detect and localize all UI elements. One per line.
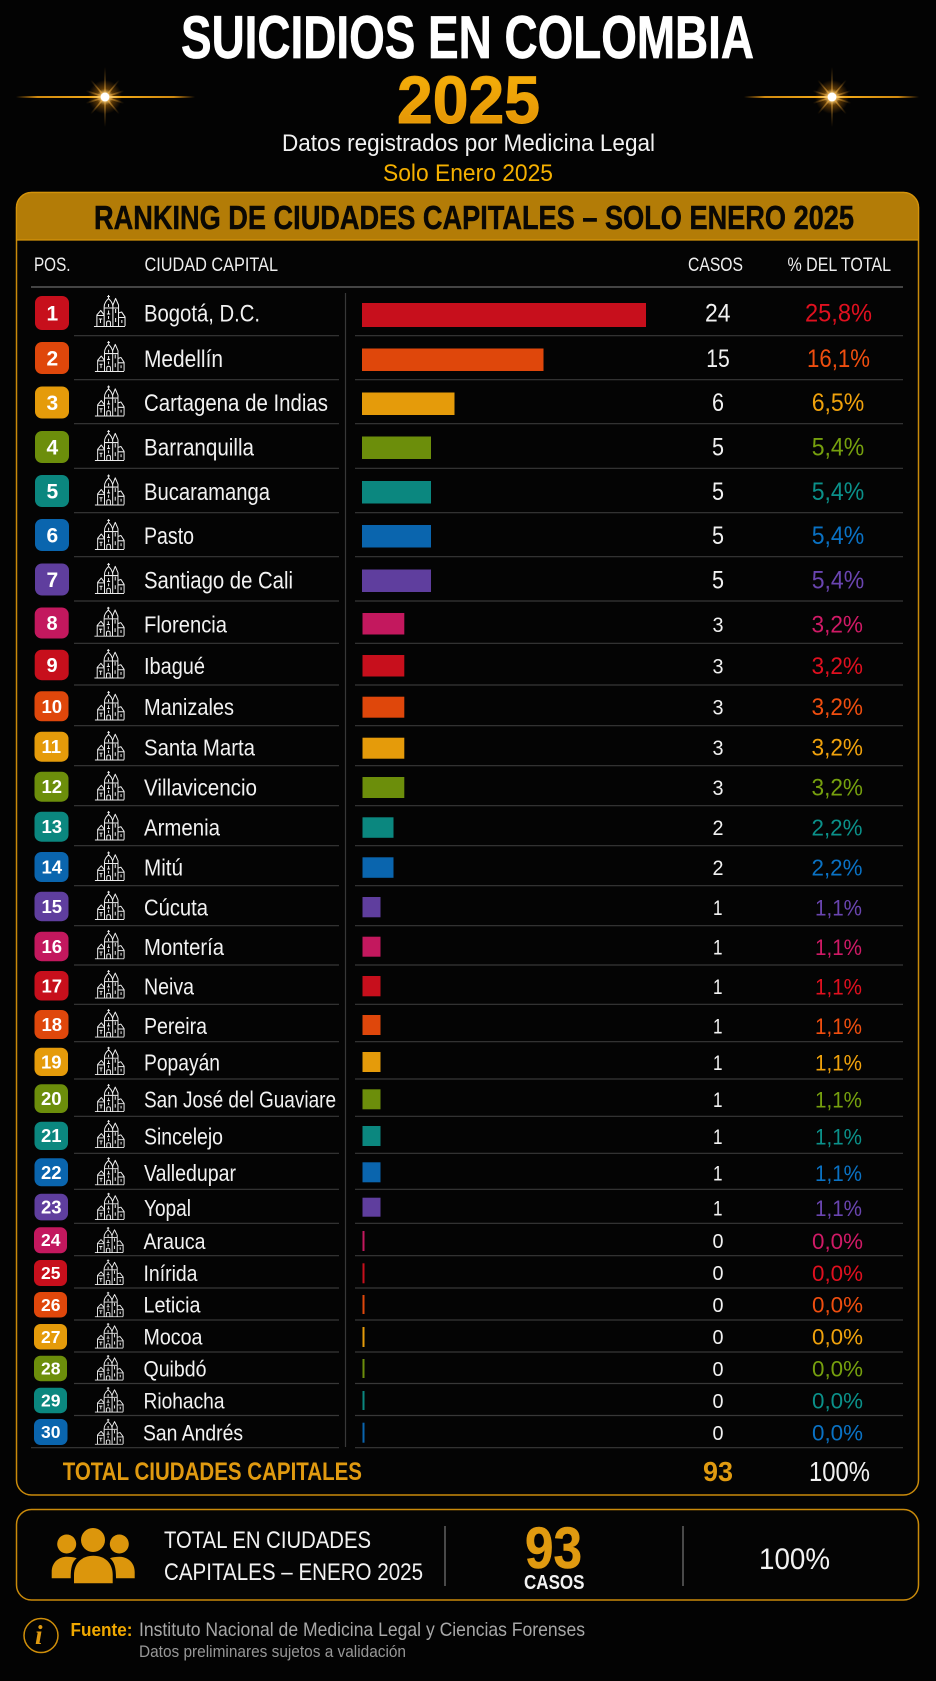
icon: church — [95, 771, 124, 800]
bar — [362, 1295, 364, 1314]
bar — [362, 897, 380, 917]
badge 10 — [34, 691, 68, 721]
bar — [362, 817, 394, 838]
city: Arauca — [144, 1229, 206, 1254]
summary label: TOTAL EN CIUDADES — [164, 1527, 371, 1554]
share: 3,2% — [812, 735, 863, 762]
cases: 1 — [713, 936, 722, 960]
share: 25,8% — [805, 300, 872, 328]
badge 19 — [34, 1048, 68, 1076]
badge 13 — [34, 812, 68, 842]
badge 17 — [34, 971, 68, 1000]
badge 23: 23 — [41, 1196, 62, 1218]
icon: church — [95, 1047, 124, 1075]
bar — [362, 303, 646, 327]
summary cases label: CASOS — [524, 1572, 584, 1594]
summary share: 100% — [759, 1543, 830, 1576]
subtitle: Datos registrados por Medicina Legal — [282, 130, 655, 157]
city: Yopal — [144, 1195, 191, 1221]
cases: 3 — [712, 696, 724, 720]
badge 3 — [35, 386, 69, 418]
city: Cúcuta — [144, 894, 208, 920]
city: Pereira — [144, 1013, 207, 1039]
bar — [362, 348, 544, 371]
city: Pasto — [144, 523, 194, 550]
cases: 3 — [712, 614, 724, 637]
icon: church — [95, 1292, 123, 1317]
badge 2 — [35, 342, 69, 374]
share: 0,0% — [812, 1293, 863, 1318]
badge 15: 15 — [42, 896, 62, 917]
row 20 — [34, 1084, 862, 1113]
row 3 — [35, 386, 864, 418]
icon: left flare — [16, 67, 195, 127]
icon: church — [95, 1009, 124, 1037]
cases: 2 — [712, 817, 724, 840]
row 16 — [34, 930, 862, 961]
share: 5,4% — [812, 522, 864, 550]
share: 3,2% — [812, 653, 863, 680]
badge 10: 10 — [42, 696, 62, 717]
badge 16 — [34, 932, 68, 961]
bar — [362, 1052, 380, 1072]
badge 24 — [34, 1227, 67, 1253]
city: Ibagué — [144, 653, 205, 679]
icon: church — [95, 1260, 123, 1285]
row 15 — [34, 891, 862, 921]
city: Santiago de Cali — [144, 568, 293, 594]
source text: Instituto Nacional de Medicina Legal y Ciencias Forenses — [139, 1619, 585, 1641]
cases: 0 — [712, 1326, 724, 1349]
cases: 3 — [712, 737, 724, 760]
icon: church — [95, 430, 124, 461]
bar — [362, 1126, 380, 1146]
badge 3: 3 — [46, 392, 58, 415]
badge 4: 4 — [46, 436, 58, 460]
badge 1: 1 — [46, 302, 58, 326]
icon: church — [95, 811, 124, 840]
icon: church — [95, 1419, 123, 1444]
share: 2,2% — [812, 855, 862, 881]
cases: 1 — [713, 976, 722, 999]
row 21 — [34, 1120, 862, 1150]
share: 1,1% — [815, 1161, 862, 1186]
row 13 — [34, 811, 862, 842]
badge 26 — [34, 1292, 67, 1318]
badge 20 — [34, 1084, 68, 1113]
city: Inírida — [144, 1261, 198, 1286]
badge 19: 19 — [41, 1051, 62, 1072]
total share: 100% — [809, 1456, 870, 1487]
share: 0,0% — [812, 1389, 863, 1414]
badge 8: 8 — [46, 613, 58, 635]
bar — [362, 777, 404, 798]
badge 1 — [35, 296, 69, 330]
badge 22: 22 — [41, 1162, 62, 1183]
row 30 — [34, 1419, 863, 1446]
share: 1,1% — [815, 1087, 862, 1112]
cases: 0 — [712, 1422, 724, 1445]
badge 2: 2 — [46, 348, 58, 370]
icon: info: i — [35, 1620, 43, 1650]
icon: church — [95, 1355, 123, 1380]
icon: church — [94, 607, 124, 636]
badge 25 — [34, 1260, 67, 1286]
row 24 — [34, 1227, 863, 1254]
badge 14 — [34, 852, 68, 882]
row 28 — [34, 1355, 863, 1381]
cases: 3 — [712, 656, 724, 678]
city: Riohacha — [144, 1389, 225, 1414]
icon: people — [52, 1528, 135, 1583]
badge 5: 5 — [46, 480, 58, 504]
badge 21: 21 — [41, 1125, 62, 1146]
cases: 0 — [712, 1358, 724, 1381]
share: 5,4% — [812, 566, 864, 594]
city: Cartagena de Indias — [144, 390, 328, 417]
badge 13: 13 — [42, 816, 62, 837]
subtitle period: Solo Enero 2025 — [383, 160, 553, 187]
city: San Andrés — [143, 1421, 243, 1446]
icon: info — [24, 1618, 58, 1652]
cases: 15 — [706, 345, 730, 373]
bar — [362, 1198, 380, 1217]
icon: church — [95, 691, 124, 720]
cases: 0 — [712, 1230, 724, 1253]
icon: church — [95, 1193, 124, 1220]
badge 20: 20 — [41, 1088, 62, 1109]
badge 7 — [35, 564, 69, 596]
city: Valledupar — [144, 1160, 236, 1186]
badge 12 — [34, 772, 68, 802]
city: Santa Marta — [144, 735, 256, 761]
city: Sincelejo — [144, 1123, 223, 1149]
share: 2,2% — [812, 815, 862, 841]
panel: summary — [16, 1510, 918, 1600]
share: 0,0% — [812, 1261, 863, 1286]
share: 3,2% — [812, 611, 863, 638]
row 18 — [34, 1009, 862, 1039]
row 25 — [34, 1260, 863, 1286]
share: 1,1% — [815, 974, 862, 999]
column header: city: CIUDAD CAPITAL — [144, 255, 278, 276]
bar — [362, 976, 380, 996]
bar — [362, 1423, 364, 1443]
row 17 — [34, 970, 862, 1000]
cases: 0 — [712, 1390, 724, 1413]
badge 18: 18 — [42, 1014, 62, 1035]
row 7 — [35, 563, 864, 596]
cases: 0 — [712, 1294, 724, 1317]
cases: 1 — [713, 1198, 722, 1220]
bar — [362, 1162, 380, 1182]
badge 30 — [34, 1419, 68, 1445]
cases: 5 — [712, 566, 724, 594]
row 12 — [34, 771, 863, 802]
total label: TOTAL CIUDADES CAPITALES — [63, 1458, 362, 1486]
city: Popayán — [144, 1050, 220, 1076]
source — [70, 1619, 585, 1661]
cases: 1 — [713, 1162, 722, 1186]
icon: church — [94, 295, 125, 326]
city: Quibdó — [144, 1356, 206, 1381]
bar — [362, 857, 394, 878]
row 11 — [34, 731, 863, 762]
share: 1,1% — [815, 896, 862, 920]
bar — [362, 436, 431, 459]
badge 6: 6 — [46, 524, 58, 548]
share: 1,1% — [815, 935, 862, 960]
cases: 5 — [712, 478, 724, 506]
cases: 1 — [713, 1052, 722, 1075]
share: 5,4% — [812, 434, 864, 462]
share: 0,0% — [812, 1325, 863, 1350]
row 10 — [34, 691, 863, 721]
icon: church — [95, 1157, 124, 1185]
cases: 5 — [712, 522, 724, 550]
row 5 — [35, 474, 864, 507]
city: Mocoa — [144, 1325, 203, 1350]
share: 1,1% — [815, 1196, 862, 1221]
badge 24: 24 — [41, 1230, 61, 1250]
summary label — [164, 1527, 423, 1586]
icon: church — [95, 930, 124, 959]
cases: 1 — [713, 1089, 722, 1112]
bar — [362, 570, 431, 592]
bar — [362, 1231, 364, 1251]
badge 29: 29 — [41, 1391, 61, 1411]
badge 14: 14 — [42, 856, 63, 878]
icon: church — [95, 1120, 124, 1148]
badge 28 — [34, 1356, 67, 1381]
share: 16,1% — [807, 345, 870, 373]
row 1 — [35, 295, 872, 330]
badge 29 — [34, 1388, 67, 1413]
icon: church — [94, 649, 124, 678]
badge 15 — [34, 892, 68, 921]
summary cases number: 93 — [525, 1516, 582, 1581]
row 6 — [35, 519, 864, 551]
badge 21 — [34, 1122, 68, 1150]
cases: 3 — [712, 777, 724, 800]
total row — [63, 1456, 870, 1487]
city: Neiva — [144, 973, 194, 999]
city: Florencia — [144, 611, 228, 637]
bar — [362, 525, 431, 548]
row 23 — [34, 1193, 862, 1221]
cases: 6 — [712, 389, 724, 417]
column header: cases: CASOS — [688, 255, 743, 276]
row 2 — [35, 341, 870, 374]
share: 6,5% — [812, 389, 864, 417]
city: Leticia — [144, 1293, 201, 1318]
city: Villavicencio — [144, 775, 257, 801]
cases: 2 — [712, 857, 724, 880]
badge 8 — [35, 608, 69, 638]
badge 7: 7 — [46, 569, 58, 592]
badge 27: 27 — [41, 1327, 60, 1347]
year heading: 2025 — [397, 63, 540, 138]
cases: 1 — [713, 1126, 722, 1149]
bar — [362, 1015, 380, 1035]
city: Barranquilla — [144, 434, 254, 462]
badge 17: 17 — [42, 975, 62, 996]
badge 9: 9 — [46, 655, 58, 677]
cases: 5 — [712, 434, 724, 462]
city: Armenia — [144, 815, 220, 841]
icon: church — [95, 519, 124, 550]
column header: position: POS. — [34, 255, 70, 276]
badge 11: 11 — [42, 736, 61, 757]
badge 28: 28 — [41, 1359, 61, 1379]
row 27 — [34, 1323, 863, 1350]
bar — [362, 1089, 380, 1109]
badge 5 — [35, 475, 69, 507]
badge 6 — [35, 519, 69, 551]
total cases: 93 — [703, 1456, 733, 1487]
bar — [362, 697, 404, 718]
row 8 — [35, 607, 863, 638]
icon: church — [95, 1084, 124, 1112]
badge 30: 30 — [41, 1422, 61, 1442]
share: 3,2% — [812, 775, 863, 802]
source label: Fuente: — [70, 1619, 132, 1640]
share: 1,1% — [815, 1124, 862, 1149]
badge 25: 25 — [41, 1263, 61, 1283]
share: 5,4% — [812, 478, 864, 506]
badge 27 — [34, 1324, 67, 1350]
icon: church — [95, 731, 124, 760]
icon: church — [95, 891, 124, 920]
icon: church — [95, 1387, 123, 1412]
bar — [362, 1391, 364, 1410]
share: 1,1% — [815, 1014, 862, 1039]
city: Bogotá, D.C. — [144, 301, 260, 328]
cases: 1 — [713, 1016, 722, 1038]
city: Manizales — [144, 694, 234, 720]
icon: church — [95, 386, 124, 416]
icon: church — [95, 1227, 123, 1253]
title: SUICIDIOS EN COLOMBIA — [181, 4, 754, 71]
bar — [362, 613, 404, 634]
share: 0,0% — [812, 1356, 863, 1381]
row 29 — [34, 1387, 863, 1414]
badge 22 — [34, 1158, 68, 1186]
row 9 — [35, 649, 863, 680]
bar — [362, 937, 380, 957]
icon: right flare — [744, 67, 919, 127]
cases: 24 — [705, 300, 731, 328]
bar — [362, 1327, 364, 1347]
badge 12: 12 — [42, 776, 62, 797]
icon: church — [95, 970, 124, 998]
source note: Datos preliminares sujetos a validación — [139, 1643, 406, 1661]
badge 23 — [34, 1194, 68, 1220]
summary label: CAPITALES – ENERO 2025 — [164, 1559, 423, 1586]
icon: church — [95, 341, 124, 372]
cases: 0 — [712, 1262, 724, 1285]
bar — [362, 1263, 364, 1283]
row 22 — [34, 1157, 862, 1186]
city: San José del Guaviare — [144, 1086, 336, 1112]
share: 0,0% — [812, 1229, 863, 1254]
badge 9 — [35, 650, 69, 680]
badge 26: 26 — [41, 1295, 61, 1315]
icon: church — [95, 1323, 123, 1348]
badge 4 — [35, 431, 69, 463]
bar — [362, 392, 454, 415]
row 19 — [34, 1047, 862, 1076]
share: 0,0% — [812, 1421, 863, 1446]
badge 11 — [34, 732, 68, 762]
city: Mitú — [144, 855, 183, 881]
row 26 — [34, 1292, 863, 1318]
city: Montería — [144, 934, 224, 960]
icon: church — [95, 852, 124, 881]
bar — [362, 738, 404, 759]
badge 16: 16 — [42, 936, 62, 957]
bar — [362, 1359, 364, 1378]
share: 3,2% — [812, 694, 863, 721]
bar — [362, 481, 431, 504]
cases: 1 — [713, 897, 722, 920]
icon: church — [95, 563, 124, 594]
city: Medellín — [144, 346, 223, 373]
city: Bucaramanga — [144, 479, 270, 506]
icon: church — [95, 474, 124, 505]
row 14 — [34, 852, 862, 882]
row 4 — [35, 430, 864, 463]
panel: ranking table — [16, 192, 918, 1495]
badge 18 — [34, 1010, 68, 1039]
column header: share: % DEL TOTAL — [788, 255, 891, 276]
share: 1,1% — [815, 1051, 862, 1076]
bar — [362, 655, 404, 676]
